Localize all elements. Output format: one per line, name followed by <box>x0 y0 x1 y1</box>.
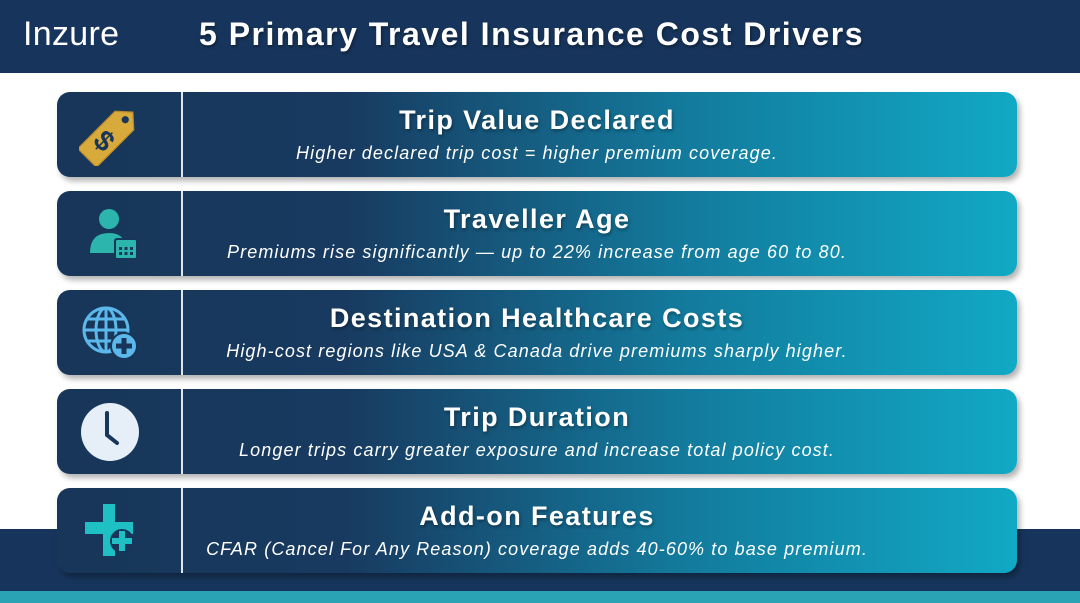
panel: traveller age <box>57 191 1017 276</box>
panel: destination healthcare <box>57 290 1017 375</box>
text: destination healthcare: Destination Healthcare Costs <box>330 303 744 333</box>
icon: person calendar <box>90 209 136 258</box>
text: trip duration <box>239 402 835 460</box>
text: destination healthcare: High-cost regions like USA & Canada drive premiums sharply higher. <box>226 341 848 361</box>
panel: trip value <box>57 92 1017 177</box>
panel: trip duration <box>57 389 1017 474</box>
panel: add-on features <box>57 488 1017 573</box>
icon: plus plus <box>85 504 133 556</box>
text: add-on features: CFAR (Cancel For Any Reason) coverage adds 40-60% to base premium. <box>206 539 868 559</box>
text: add-on features <box>206 501 868 559</box>
title: 5 Primary Travel Insurance Cost Drivers <box>199 16 864 52</box>
text: trip value: Higher declared trip cost = higher premium coverage. <box>296 143 778 163</box>
text: traveller age: Traveller Age <box>444 204 630 234</box>
text: add-on features: Add-on Features <box>419 501 655 531</box>
icon: price tag <box>79 110 134 166</box>
logo: Inzure <box>23 15 119 53</box>
text: destination healthcare <box>226 303 848 361</box>
icon: globe plus <box>82 306 136 358</box>
bottom band <box>0 529 1080 591</box>
header bar <box>0 0 1080 73</box>
text: traveller age <box>227 204 847 262</box>
icon: clock <box>81 403 139 461</box>
text: trip value: Trip Value Declared <box>399 105 675 135</box>
icon: price tag: $ <box>87 124 121 158</box>
text: trip duration: Trip Duration <box>444 402 630 432</box>
text: trip duration: Longer trips carry greater exposure and increase total policy cost. <box>239 440 835 460</box>
text: trip value <box>296 105 778 163</box>
text: traveller age: Premiums rise significantly — up to 22% increase from age 60 to 80. <box>227 242 847 262</box>
